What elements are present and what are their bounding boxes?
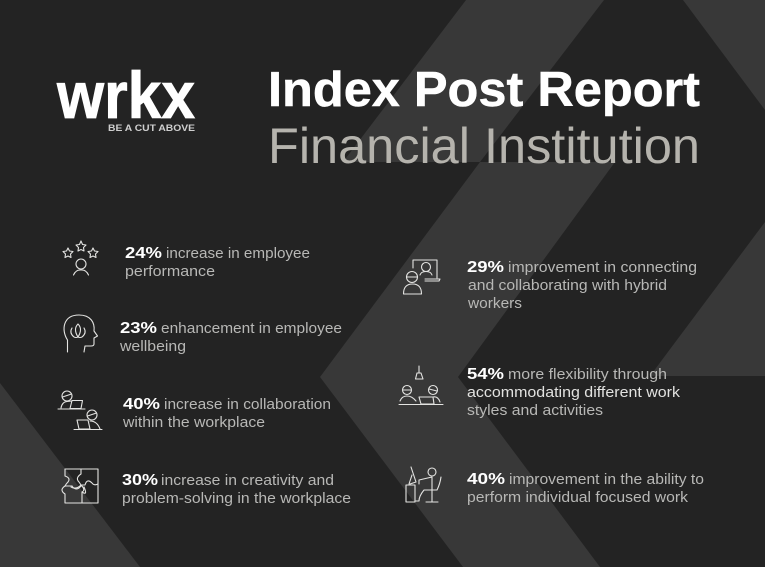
subtitle: Financial Institution (268, 118, 700, 174)
stat: collaboration: increase in collaboration (164, 396, 331, 413)
stat: creativity: problem-solving in the workplace (122, 490, 351, 507)
stat: focused work (406, 467, 704, 506)
icon: puzzle pieces (62, 469, 98, 503)
stat: employee performance: increase in employee (166, 245, 310, 262)
stat: employee performance (63, 241, 310, 280)
icon: stars above person (63, 241, 98, 275)
icon: two people under a lamp (399, 366, 443, 404)
stat: hybrid workers: improvement in connecting (508, 259, 697, 276)
stat: employee wellbeing (64, 315, 342, 355)
stat: flexibility: styles and activities (467, 402, 603, 419)
stat: employee wellbeing: wellbeing (119, 338, 186, 355)
title: Index Post Report (268, 63, 700, 117)
icon: two people at laptops (58, 391, 102, 430)
icon: head with lotus (64, 315, 98, 352)
stat: employee performance: 24% (125, 245, 162, 262)
logo: wrkx: wrkx (56, 58, 195, 132)
stat: focused work: improvement in the ability to (509, 471, 704, 488)
stat: focused work: perform individual focused work (467, 489, 689, 506)
icon: person on video call (404, 260, 440, 294)
stat: employee wellbeing: 23% (120, 320, 157, 337)
stat: creativity: 30% (122, 472, 158, 489)
stat: creativity (62, 469, 351, 507)
stat: collaboration: 40% (123, 396, 160, 413)
stat: flexibility: more flexibility through (508, 366, 667, 383)
stat: collaboration: within the workplace (122, 414, 265, 431)
stat: focused work: 40% (467, 471, 505, 488)
stat: hybrid workers: workers (467, 295, 522, 312)
stat: flexibility (399, 366, 681, 419)
stat: collaboration (58, 391, 331, 431)
stat: creativity: increase in creativity and (161, 472, 334, 489)
icon: person working at desk (406, 467, 441, 502)
stat: employee performance: performance (125, 263, 215, 280)
stat: flexibility: 54% (467, 366, 504, 383)
stat: employee wellbeing: enhancement in employee (161, 320, 342, 337)
logo: wrkx: BE A CUT ABOVE (108, 123, 195, 134)
stat: hybrid workers (404, 259, 697, 312)
stat: hybrid workers: 29% (467, 259, 504, 276)
stat: hybrid workers: and collaborating with hybrid (468, 277, 667, 294)
stat: flexibility: accommodating different work (467, 384, 681, 401)
